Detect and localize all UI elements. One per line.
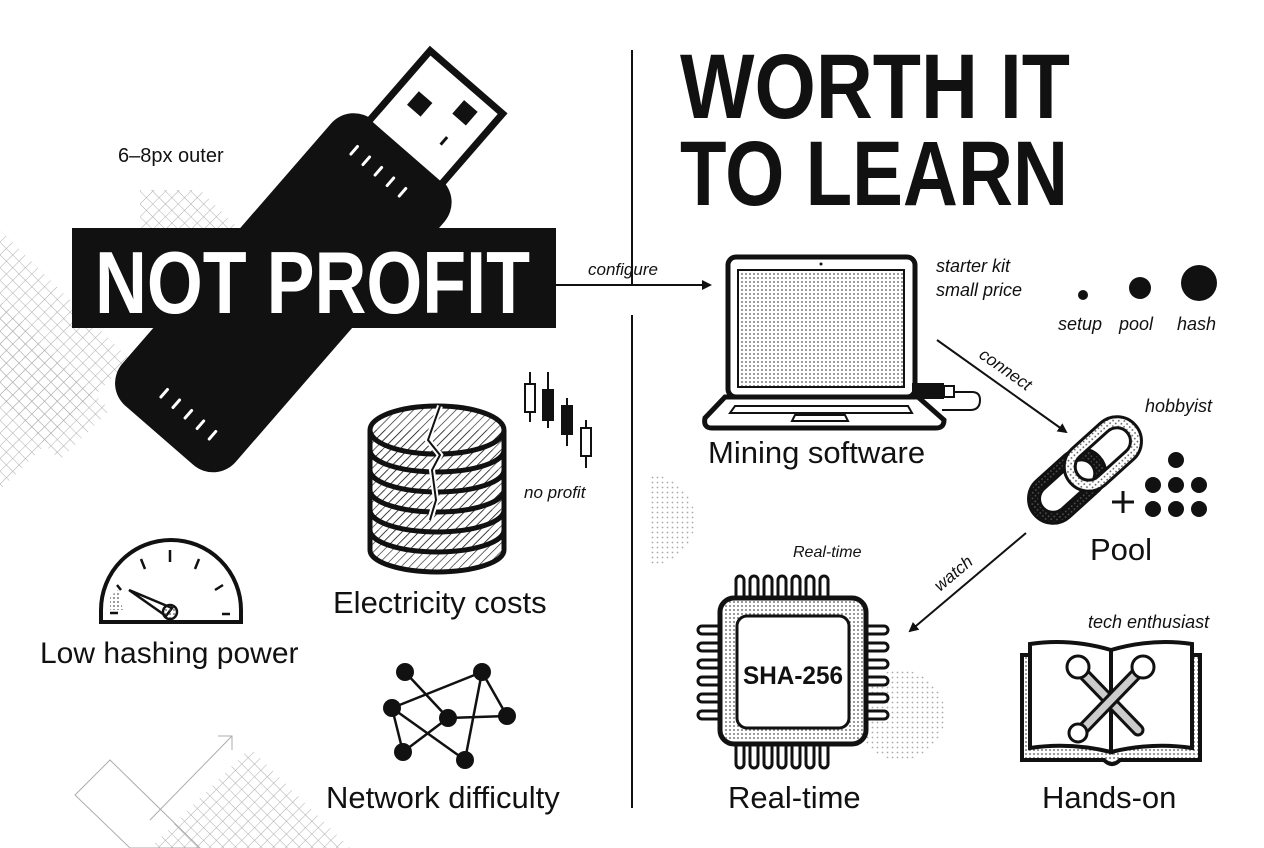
label: tech enthusiast: tech enthusiast xyxy=(1088,612,1210,632)
label: real-time: Real-time xyxy=(728,780,861,815)
background grid patterns xyxy=(0,190,350,848)
icon: gauge xyxy=(101,540,241,622)
legend: dots: pool xyxy=(1118,314,1154,334)
icon: chip SHA-256 xyxy=(698,576,888,768)
callout: starter kit xyxy=(936,256,1022,300)
dotted half circle decoration xyxy=(650,475,695,565)
label: hands-on: Hands-on xyxy=(1042,780,1176,815)
icon: laptop xyxy=(705,257,980,428)
icon: candlesticks xyxy=(525,372,591,468)
arrow: watch: watch xyxy=(930,552,977,595)
icon: book with tools xyxy=(1022,642,1200,764)
callout: starter kit: starter kit xyxy=(936,256,1011,276)
dotted circle decoration xyxy=(855,670,945,760)
label: low hashing power: Low hashing power xyxy=(40,637,299,670)
callout: starter kit: small price xyxy=(936,280,1022,300)
label: no profit: no profit xyxy=(524,483,587,502)
label: real-time small: Real-time xyxy=(793,544,862,561)
title: TO LEARN xyxy=(680,123,1068,225)
icon: plus pool dots xyxy=(1112,452,1207,517)
label: electricity costs: Electricity costs xyxy=(333,585,547,620)
icon: chain link xyxy=(1026,414,1144,526)
title: WORTH IT xyxy=(680,36,1070,138)
title xyxy=(680,36,1070,225)
icon: coin stack xyxy=(370,406,504,572)
divider xyxy=(631,50,633,808)
icon: network xyxy=(383,663,516,769)
NOT PROFIT banner: NOT PROFIT xyxy=(95,233,530,332)
icon: usb stick xyxy=(103,33,523,485)
arrow: connect xyxy=(937,340,1066,432)
label: mining software: Mining software xyxy=(708,435,925,470)
icon: chip SHA-256: SHA-256 xyxy=(743,662,843,690)
legend: dots xyxy=(1058,265,1217,334)
arrow: configure: configure xyxy=(588,260,658,279)
arrow: connect: connect xyxy=(976,345,1036,395)
label: network difficulty: Network difficulty xyxy=(326,780,560,815)
legend: dots: setup xyxy=(1058,314,1102,334)
label: hobbyist: hobbyist xyxy=(1145,396,1213,416)
arrow: watch xyxy=(910,533,1026,631)
label: 6-8px outer: 6–8px outer xyxy=(118,145,224,167)
legend: dots: hash xyxy=(1177,314,1216,334)
label: pool: Pool xyxy=(1090,532,1152,567)
